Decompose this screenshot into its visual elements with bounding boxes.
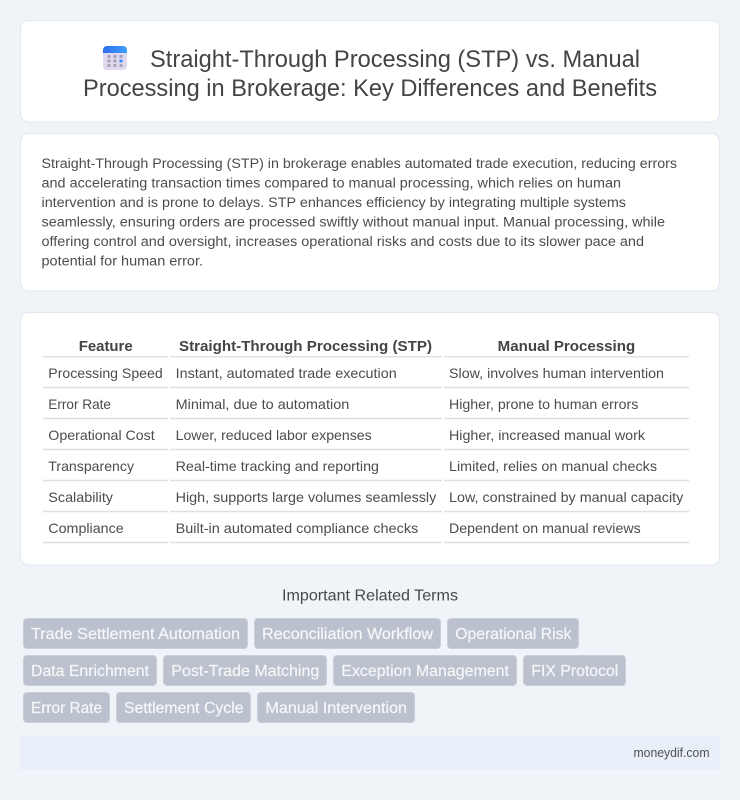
tag: trade settlement automation: Trade Settlement Automation	[31, 626, 240, 643]
row: transparency: Transparency	[48, 458, 134, 474]
title: Processing in Brokerage: Key Differences and Benefits	[83, 75, 657, 102]
footer bar	[20, 736, 720, 770]
title: Straight-Through Processing (STP) vs. Manual	[150, 46, 640, 73]
row: processing speed: Slow, involves human intervention	[449, 365, 664, 381]
tag: error rate: Error Rate	[31, 700, 102, 717]
description text	[42, 156, 677, 270]
row: error rate: Minimal, due to automation	[176, 396, 349, 412]
row: error rate: Error Rate	[48, 396, 111, 412]
tag: data enrichment	[24, 656, 156, 686]
panel: comparison table	[20, 312, 720, 565]
description text: potential for human error.	[42, 254, 203, 270]
table header: Manual Processing	[498, 338, 635, 355]
tag: reconciliation workflow: Reconciliation Workflow	[262, 626, 433, 643]
row: operational cost: Higher, increased manual work	[449, 427, 646, 443]
related term tags	[24, 618, 626, 722]
tag: reconciliation workflow	[254, 618, 440, 648]
tag: manual intervention	[258, 692, 414, 722]
row: error rate	[48, 396, 638, 412]
panel: description	[20, 134, 720, 291]
footer credit: moneydif.com	[634, 745, 710, 760]
tag: settlement cycle: Settlement Cycle	[124, 700, 244, 717]
tag: operational risk	[448, 618, 578, 648]
table header: Feature	[79, 338, 133, 355]
description text: intervention and is prone to delays. STP enhances efficiency by integrating multiple systems	[42, 195, 626, 211]
row: compliance	[48, 520, 641, 536]
tag: exception management	[334, 656, 516, 686]
row: processing speed	[48, 365, 664, 381]
row: transparency: Real-time tracking and reporting	[176, 458, 379, 474]
row: scalability: High, supports large volumes seamlessly	[176, 489, 436, 505]
description text: Straight-Through Processing (STP) in brokerage enables automated trade execution, reducing errors	[42, 156, 677, 172]
tag: fix protocol	[524, 656, 626, 686]
row: compliance: Built-in automated compliance checks	[176, 520, 418, 536]
tag: fix protocol: FIX Protocol	[531, 663, 618, 680]
panel: title header	[20, 20, 720, 122]
row: operational cost: Operational Cost	[48, 427, 155, 443]
title	[83, 46, 657, 102]
tag: trade settlement automation	[24, 618, 248, 648]
row: compliance: Compliance	[48, 520, 124, 536]
icon: calendar	[103, 46, 127, 70]
row: transparency: Limited, relies on manual checks	[449, 458, 657, 474]
tag: manual intervention: Manual Intervention	[266, 700, 407, 717]
tag: exception management: Exception Management	[341, 663, 510, 680]
row: error rate: Higher, prone to human errors	[449, 396, 638, 412]
tag: error rate	[24, 692, 110, 722]
heading: important related terms: Important Related Terms	[282, 588, 458, 604]
description text: offering control and oversight, increases operational risks and costs due to its slower pace and	[42, 234, 644, 250]
row: transparency	[48, 458, 657, 474]
table header: Straight-Through Processing (STP)	[179, 338, 432, 355]
row: operational cost: Lower, reduced labor expenses	[176, 427, 372, 443]
tag: post-trade matching: Post-Trade Matching	[171, 663, 319, 680]
tag: settlement cycle	[116, 692, 250, 722]
description text: and accelerating transaction times compared to manual processing, which relies on human	[42, 176, 621, 192]
row: processing speed: Instant, automated trade execution	[176, 365, 397, 381]
tag: post-trade matching	[164, 656, 326, 686]
description text: seamlessly, ensuring orders are processed swiftly without manual input. Manual processing, while	[42, 214, 665, 230]
row: compliance: Dependent on manual reviews	[449, 520, 641, 536]
table header	[79, 338, 635, 355]
row: scalability	[48, 489, 683, 505]
row: scalability: Low, constrained by manual capacity	[449, 489, 683, 505]
tag: data enrichment: Data Enrichment	[31, 663, 150, 680]
tag: operational risk: Operational Risk	[455, 626, 572, 643]
row: processing speed: Processing Speed	[48, 365, 163, 381]
row: scalability: Scalability	[48, 489, 113, 505]
row: operational cost	[48, 427, 646, 443]
